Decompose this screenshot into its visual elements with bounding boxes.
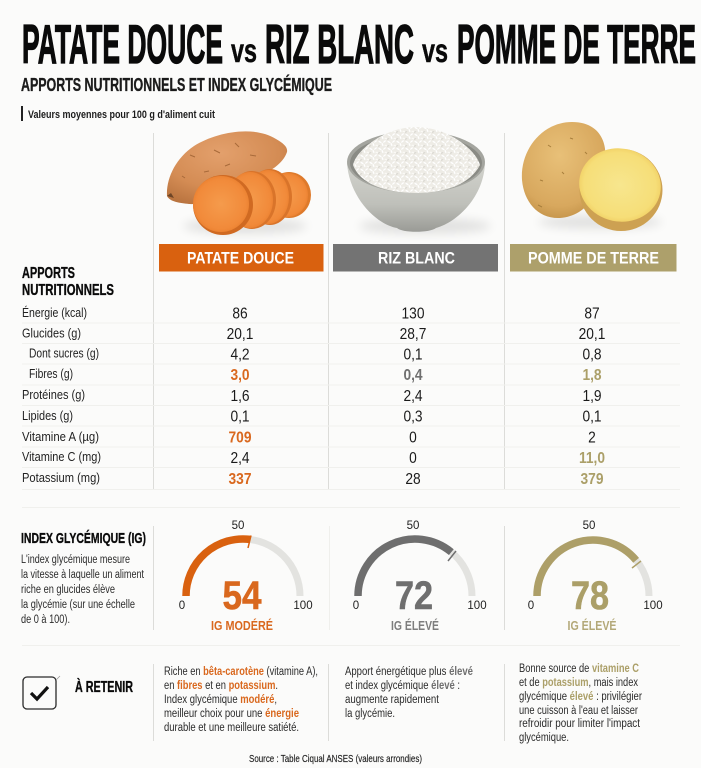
values: pomme de terre: 11,0 — [579, 449, 605, 467]
values: riz blanc: 28,7 — [400, 325, 426, 343]
values: riz blanc: 0,3 — [403, 408, 423, 426]
heading: à retenir: À RETENIR — [75, 679, 133, 696]
takeaway: riz blanc — [345, 666, 473, 720]
gauge: pomme de terre IG 78: 50 — [583, 520, 595, 532]
gauge: riz blanc IG 72 — [353, 520, 487, 633]
title: vs — [231, 32, 257, 69]
values: patate douce: 4,2 — [230, 346, 250, 364]
values: pomme de terre: 87 — [584, 305, 600, 323]
gauge: riz blanc IG 72: 100 — [467, 600, 487, 612]
values: pomme de terre: 2 — [588, 429, 596, 447]
subtitle: APPORTS NUTRITIONNELS ET INDEX GLYCÉMIQUE — [21, 74, 332, 95]
heading: index glycémique: INDEX GLYCÉMIQUE (IG) — [21, 530, 146, 547]
text: glycemic index explanation: L'index glycémique mesure — [21, 554, 130, 566]
source: Source : Table Ciqual ANSES (valeurs arrondies) — [249, 753, 422, 765]
takeaway: pomme de terre: et de potassium, mais index — [519, 677, 638, 689]
illustration: bowl of white rice — [347, 127, 491, 234]
heading: apports nutritionnels: APPORTS — [22, 265, 75, 282]
title: PATATE DOUCE — [22, 13, 223, 75]
values: pomme de terre: 1,9 — [582, 387, 602, 405]
takeaway: patate douce — [164, 666, 318, 734]
nutrition table row labels: Vitamine A (µg) — [22, 429, 99, 444]
values: riz blanc — [400, 305, 426, 488]
values: patate douce — [227, 305, 253, 488]
values: patate douce: 1,6 — [230, 387, 250, 405]
gauge: pomme de terre IG 78: 100 — [643, 600, 663, 612]
nutrition table row labels: Vitamine C (mg) — [22, 449, 101, 464]
gauge: riz blanc IG 72: IG ÉLEVÉ — [391, 618, 439, 633]
takeaway: patate douce: en fibres et en potassium. — [164, 680, 278, 692]
text: glycemic index explanation: riche en glucides élève — [21, 584, 115, 596]
takeaway: patate douce: Index glycémique modéré, — [164, 694, 277, 706]
takeaway: pomme de terre: glycémique élevé : privilégier — [519, 691, 642, 703]
text: glycemic index explanation: la glycémie (sur une échelle — [21, 599, 135, 611]
values: patate douce: 0,1 — [230, 408, 250, 426]
values: riz blanc: 0 — [409, 429, 417, 447]
heading: apports nutritionnels — [22, 265, 114, 299]
values: pomme de terre: 0,8 — [582, 346, 602, 364]
takeaway: pomme de terre: glycémique. — [519, 732, 569, 744]
column header: riz blanc: RIZ BLANC — [378, 248, 455, 268]
values: patate douce: 2,4 — [230, 449, 250, 467]
takeaway: riz blanc: Apport énergétique plus élevé — [345, 666, 473, 678]
illustration: sweet potato — [167, 131, 311, 235]
values: pomme de terre: 379 — [581, 470, 603, 488]
text: glycemic index explanation — [21, 554, 145, 626]
values: riz blanc: 130 — [402, 305, 424, 323]
takeaway: riz blanc: augmente rapidement — [345, 694, 440, 706]
takeaway: pomme de terre: une cuisson à l'eau et laisser — [519, 705, 638, 717]
icon: checkbox — [23, 676, 60, 709]
gauge: riz blanc IG 72: 50 — [407, 520, 419, 532]
gauge: patate douce IG 54 — [179, 520, 313, 633]
nutrition table row labels: Lipides (g) — [22, 408, 73, 423]
values: patate douce: 337 — [229, 470, 251, 488]
nutrition table row labels — [22, 305, 101, 485]
values: pomme de terre: 1,8 — [582, 366, 602, 384]
text: glycemic index explanation: de 0 à 100). — [21, 614, 70, 626]
nutrition table row labels: Glucides (g) — [22, 326, 81, 340]
gauge: patate douce IG 54: 50 — [232, 520, 244, 532]
takeaway: riz blanc: la glycémie. — [345, 708, 395, 720]
takeaway: patate douce: Riche en bêta-carotène (vitamine A), — [164, 666, 318, 678]
gauge: pomme de terre IG 78: 78 — [571, 574, 609, 618]
takeaway: patate douce: meilleur choix pour une énergie — [164, 708, 299, 720]
takeaway: pomme de terre: Bonne source de vitamine C — [519, 663, 639, 675]
nutrition table row labels: Protéines (g) — [22, 387, 85, 402]
values: pomme de terre: 20,1 — [579, 325, 605, 343]
title — [22, 13, 696, 75]
values: patate douce: 86 — [232, 305, 248, 323]
nutrition table row labels: Énergie (kcal) — [22, 305, 87, 320]
column header: pomme de terre — [510, 244, 676, 272]
note: serving basis: Valeurs moyennes pour 100 g d'aliment cuit — [28, 109, 215, 121]
takeaway: riz blanc: et index glycémique élevé : — [345, 680, 460, 692]
gauge: patate douce IG 54: 0 — [179, 600, 185, 612]
nutrition table row labels: Potassium (mg) — [22, 470, 100, 485]
gauge: pomme de terre IG 78: 0 — [528, 600, 534, 612]
values: patate douce: 3,0 — [230, 366, 250, 384]
gauge: pomme de terre IG 78: IG ÉLEVÉ — [568, 618, 617, 633]
gauge: patate douce IG 54: 100 — [293, 600, 313, 612]
column header: pomme de terre: POMME DE TERRE — [528, 248, 659, 268]
values: patate douce: 709 — [229, 429, 251, 447]
heading: apports nutritionnels: NUTRITIONNELS — [22, 282, 114, 299]
nutrition table row labels: Dont sucres (g) — [29, 346, 99, 360]
takeaway: patate douce: durable et une meilleure satiété. — [164, 722, 299, 734]
values: pomme de terre — [579, 305, 605, 488]
gauge: riz blanc IG 72: 72 — [395, 574, 433, 618]
illustration: potato — [522, 122, 668, 231]
values: riz blanc: 0,4 — [403, 366, 423, 384]
nutrition table row labels: Fibres (g) — [29, 366, 73, 381]
values: riz blanc: 28 — [405, 470, 421, 488]
gauge: pomme de terre IG 78 — [528, 520, 663, 633]
takeaway: pomme de terre — [519, 663, 642, 744]
gauge: patate douce IG 54: 54 — [222, 574, 262, 618]
values: riz blanc: 2,4 — [403, 387, 423, 405]
column header: patate douce: PATATE DOUCE — [187, 248, 294, 268]
values: riz blanc: 0,1 — [403, 346, 423, 364]
column header: riz blanc — [333, 244, 498, 272]
values: riz blanc: 0 — [409, 449, 417, 467]
values: patate douce: 20,1 — [227, 325, 253, 343]
takeaway: pomme de terre: refroidir pour limiter l'impact — [519, 718, 641, 730]
gauge: patate douce IG 54: IG MODÉRÉ — [211, 618, 273, 633]
title: RIZ BLANC — [265, 13, 414, 75]
values: pomme de terre: 0,1 — [582, 408, 602, 426]
title: vs — [422, 32, 448, 69]
text: glycemic index explanation: la vitesse à laquelle un aliment — [21, 569, 145, 581]
gauge: riz blanc IG 72: 0 — [353, 600, 359, 612]
column header: patate douce — [159, 244, 324, 272]
